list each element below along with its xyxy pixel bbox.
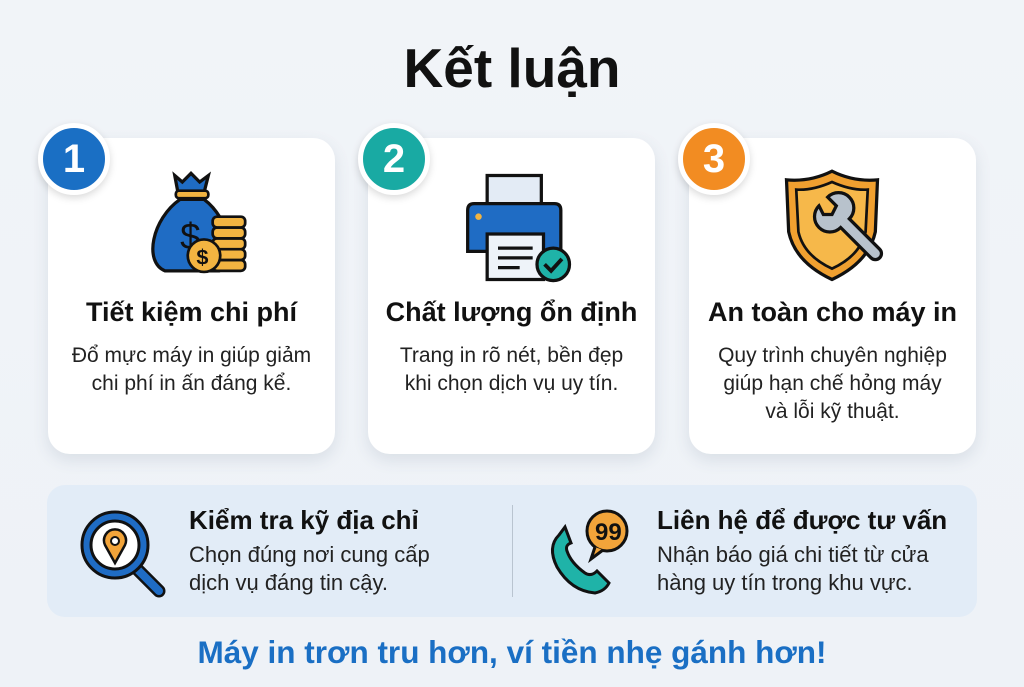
card text: khi chọn dịch vụ uy tín. <box>405 372 618 395</box>
icon: magnifier with pin <box>80 510 166 598</box>
card title: Tiết kiệm chi phí <box>86 297 297 327</box>
card text: Trang in rõ nét, bền đẹp <box>400 344 623 367</box>
card text: giúp hạn chế hỏng máy <box>723 372 942 395</box>
badge 1 <box>38 123 110 195</box>
icon: phone with quote: 99 <box>595 519 622 546</box>
card text <box>718 344 947 423</box>
text: contact <box>657 505 947 595</box>
card text: Quy trình chuyên nghiệp <box>718 344 947 367</box>
icon: money bag: $ <box>180 216 201 257</box>
icon: shield wrench <box>784 169 884 282</box>
text: check address: dịch vụ đáng tin cậy. <box>189 570 388 595</box>
icon: money bag: $ <box>196 244 208 269</box>
card 2 <box>368 138 655 454</box>
text: contact: hàng uy tín trong khu vực. <box>657 570 913 595</box>
card text: Đổ mực máy in giúp giảm <box>72 344 311 367</box>
bottom panel <box>47 485 977 617</box>
footer slogan: Máy in trơn tru hơn, ví tiền nhẹ gánh hơn! <box>198 634 826 670</box>
card title: Chất lượng ổn định <box>386 297 637 327</box>
text: contact: Liên hệ để được tư vấn <box>657 505 947 535</box>
card 3 <box>689 138 976 454</box>
text: check address: Chọn đúng nơi cung cấp <box>189 542 430 567</box>
icon: printer <box>466 174 572 282</box>
title: Kết luận <box>404 37 620 99</box>
text: check address: Kiểm tra kỹ địa chỉ <box>189 505 419 535</box>
text: contact: Nhận báo giá chi tiết từ cửa <box>657 542 929 567</box>
card text <box>72 344 311 395</box>
badge 1: 1 <box>63 137 85 181</box>
card text <box>400 344 623 395</box>
card text: và lỗi kỹ thuật. <box>765 400 900 423</box>
badge 3: 3 <box>703 137 725 181</box>
badge 3 <box>678 123 750 195</box>
icon: money bag <box>151 171 247 274</box>
badge 2 <box>358 123 430 195</box>
card 1 <box>48 138 335 454</box>
text: check address <box>189 505 430 595</box>
card title: An toàn cho máy in <box>708 297 957 327</box>
icon: phone with quote <box>550 510 628 594</box>
badge 2: 2 <box>383 137 405 181</box>
card text: chi phí in ấn đáng kể. <box>92 372 291 395</box>
